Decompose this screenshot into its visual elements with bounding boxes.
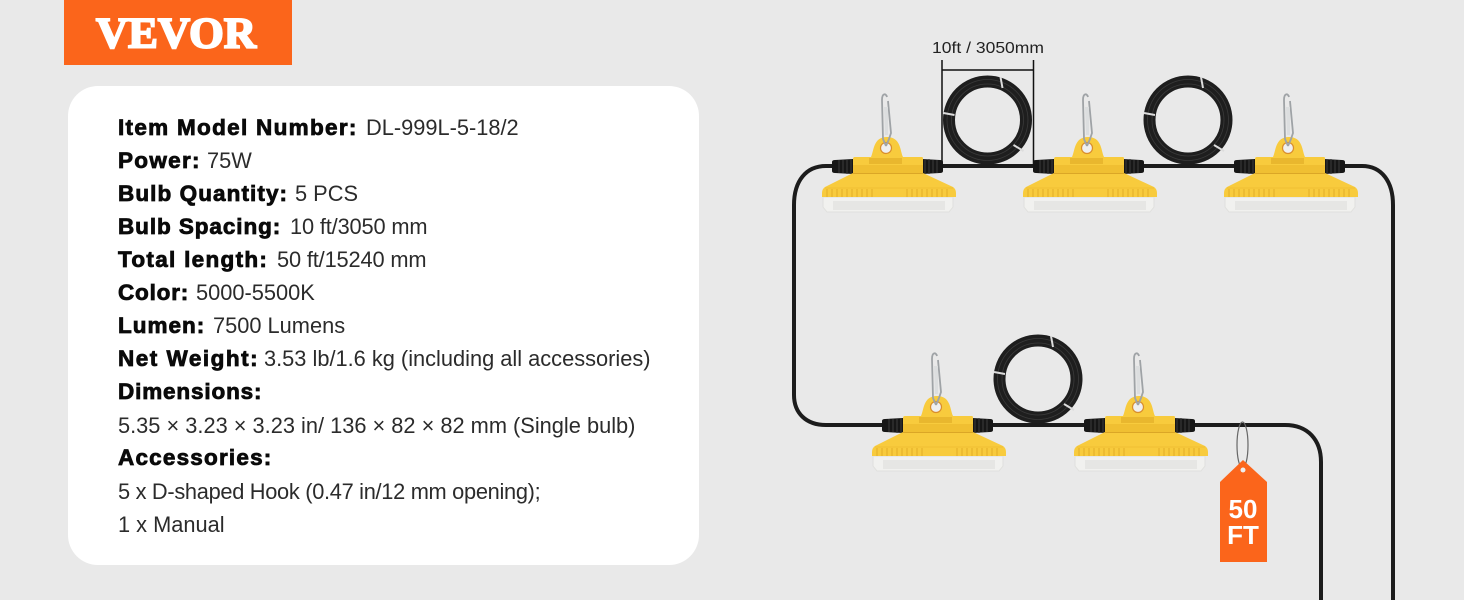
spec: bulb spacing: Bulb Spacing: [118,214,281,239]
spec: net weight: Net Weight: [118,346,259,371]
spec: bulb quantity: Bulb Quantity: [118,181,288,206]
tag: 50 FT: 50 [1229,494,1257,524]
spec: total length: Total length: [118,247,268,272]
cable coil 3 [994,336,1078,420]
spec: lumen [118,313,345,338]
spec: model number: Item Model Number: [118,115,358,140]
dimension: 10ft / 3050mm: 10ft / 3050mm [932,40,1044,57]
panel: specifications: 3.53 lb/1.6 kg (including all accessories) [264,346,650,371]
cable: top run to right side [940,166,1393,600]
spec: power: Power: [118,148,201,173]
lamp 3 [1224,94,1358,212]
cable: top run and left side [794,166,884,425]
lamp 2 [1023,94,1157,212]
spec: dimensions value: 5.35 × 3.23 × 3.23 in/ 136 × 82 × 82 mm (Single bulb) [118,413,635,438]
spec: power [118,148,252,173]
cable coil 2 [1144,77,1228,160]
spec: net weight [118,346,650,371]
lamp 1 [822,94,956,212]
panel: specifications: DL-999L-5-18/2 [366,115,519,140]
spec: hook accessory: 5 x D-shaped Hook (0.47 in/12 mm opening); [118,479,540,504]
panel: specifications: 5000-5500K [196,280,315,305]
tag: 50 FT [1220,422,1267,562]
spec: lumen: Lumen: [118,313,205,338]
spec: total length [118,247,426,272]
lamp 5 [1074,353,1208,471]
cable coil 1 [944,77,1028,160]
panel: specifications: 50 ft/15240 mm [277,247,426,272]
panel: specifications [68,86,699,565]
spec: color [118,280,315,305]
tag: 50 FT: FT [1227,520,1259,550]
spec: accessories heading: Accessories: [118,445,272,470]
spec: model number [118,115,519,140]
panel: specifications: 7500 Lumens [213,313,345,338]
spec: dimensions heading: Dimensions: [118,379,262,404]
panel: specifications: 75W [207,148,252,173]
spec: color: Color: [118,280,189,305]
panel: specifications: 5 PCS [295,181,358,206]
spec: manual accessory: 1 x Manual [118,512,225,537]
spec: bulb spacing [118,214,427,239]
dimension: 10ft / 3050mm [932,40,1044,165]
logo: VEVOR [64,0,292,65]
panel: specifications: 10 ft/3050 mm [290,214,427,239]
cable: lower run to right [990,425,1321,600]
lamp 4 [872,353,1006,471]
logo: VEVOR: VEVOR [96,10,257,58]
